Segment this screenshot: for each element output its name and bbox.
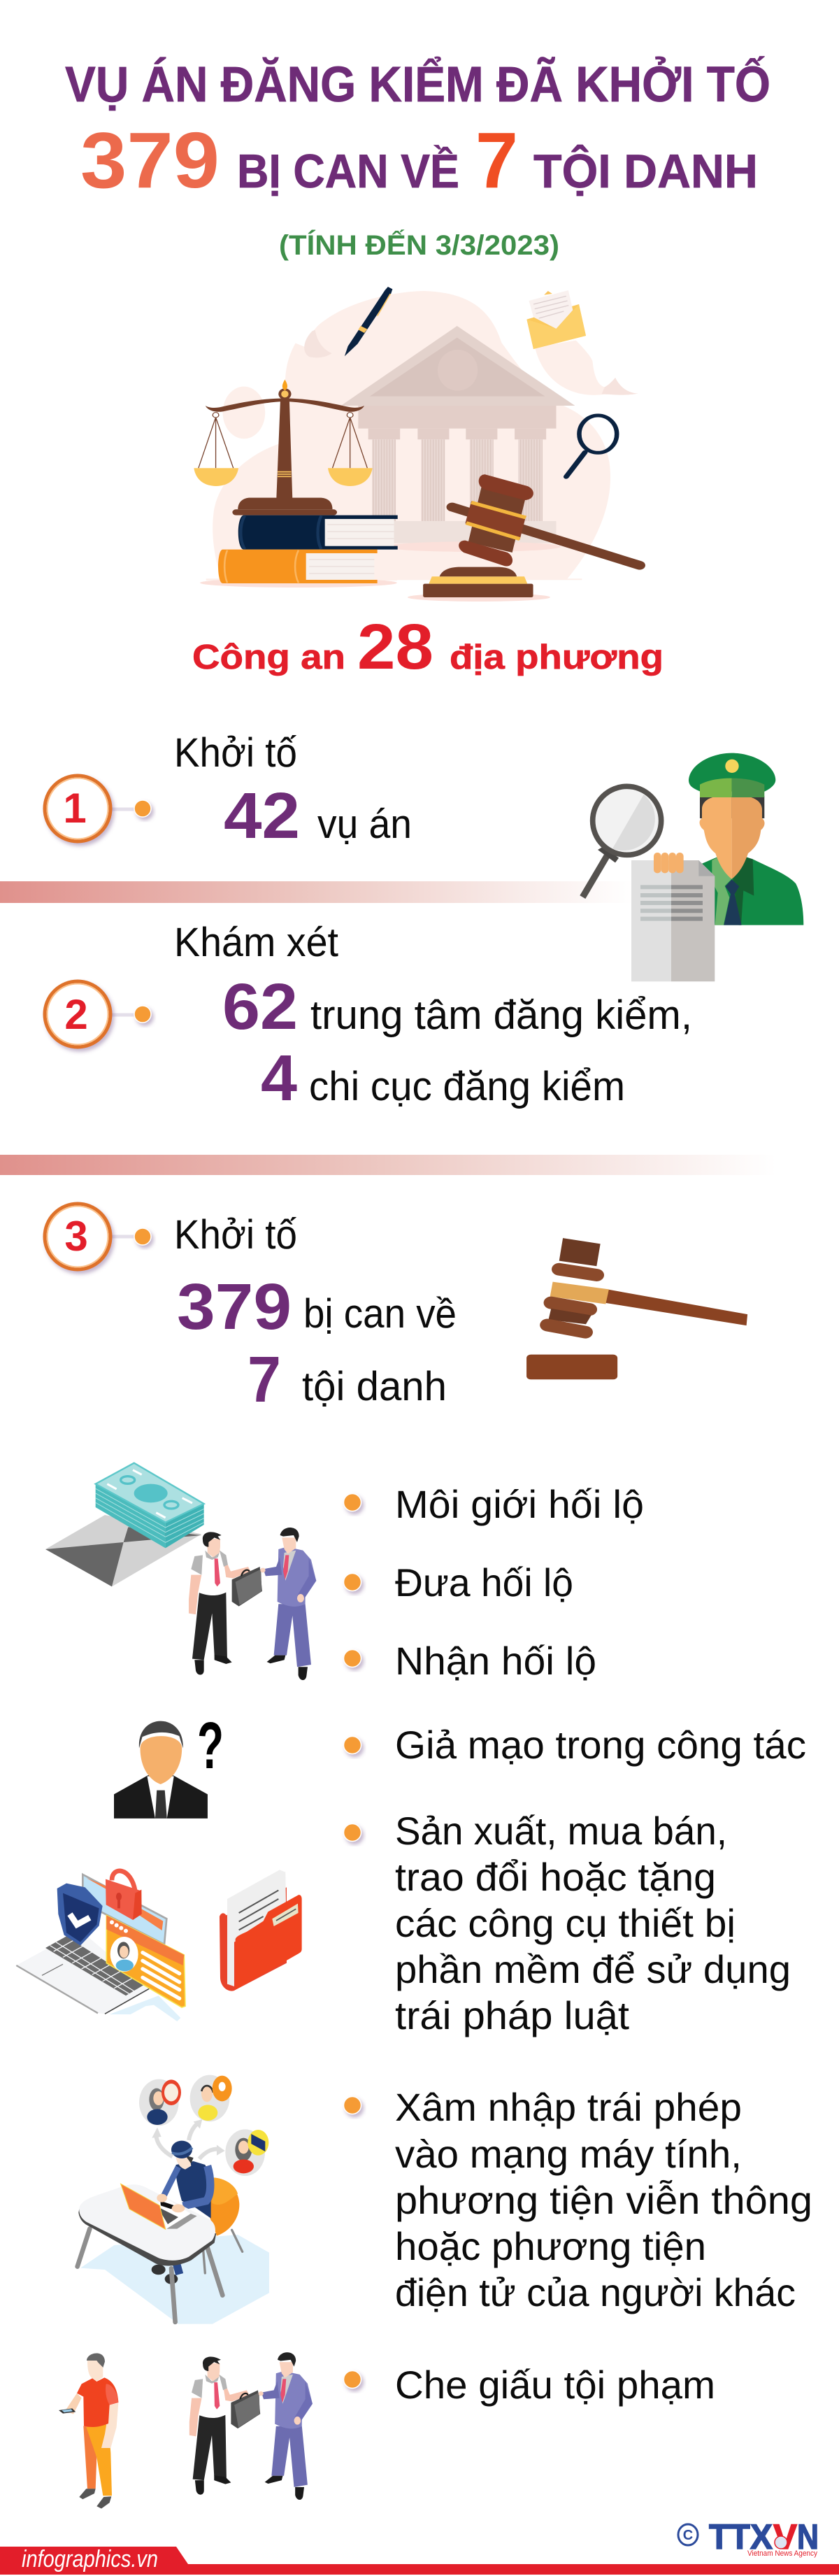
- crime list: bribery bullets: Nhận hối lộ: [395, 1639, 596, 1683]
- step 2 marker: 2: [64, 991, 88, 1038]
- step 3 marker: [45, 1204, 151, 1269]
- title line 2: [80, 116, 758, 204]
- crime: illegal tools: [344, 1809, 791, 2037]
- title line 2: BỊ CAN VỀ: [237, 144, 459, 198]
- illustration: two men exchanging briefcase (second): [189, 2352, 313, 2500]
- crime: forgery: Giả mạo trong công tác: [395, 1723, 806, 1767]
- icon: envelope: [526, 290, 586, 349]
- footer bar: [0, 2546, 839, 2575]
- title line 2: TỘI DANH: [533, 144, 758, 198]
- illustration: man with question mark: ?: [197, 1709, 224, 1783]
- crime: illegal network intrusion: điện tử của người khác: [395, 2270, 796, 2314]
- band divider 1: [0, 881, 633, 903]
- step 2 text: chi cục đăng kiểm: [309, 1064, 625, 1109]
- illustration: laptop with shield, lock and card: [16, 1871, 185, 2021]
- step 2 text: 4: [261, 1041, 297, 1114]
- courthouse: [341, 326, 575, 552]
- icon: pen: [345, 287, 392, 356]
- heading: Công an 28 địa phương: [192, 611, 664, 683]
- icon: red folder: [220, 1870, 302, 1991]
- step 3 text: 7: [248, 1343, 281, 1416]
- step 1 text: 42: [224, 779, 300, 852]
- step 3 text: [174, 1212, 457, 1416]
- step 2 text: Khám xét: [174, 920, 338, 965]
- crime: illegal network intrusion: [344, 2085, 812, 2314]
- illustration: hacker at desk with victims: [78, 2075, 269, 2324]
- step 3 marker: 3: [64, 1213, 88, 1260]
- illustration: man with question mark: [114, 1709, 224, 1819]
- icon: books: [200, 515, 398, 588]
- crime: illegal tools: Sản xuất, mua bán,: [395, 1809, 727, 1853]
- step 2 text: trung tâm đăng kiểm,: [310, 992, 692, 1038]
- heading: Công an 28 địa phương: 28: [357, 611, 433, 683]
- step 1 text: [174, 730, 412, 852]
- heading: Công an 28 địa phương: Công an: [192, 639, 345, 676]
- title line 2: 7: [475, 116, 518, 204]
- step 1 marker: [45, 776, 151, 841]
- logo: TTXVN: C: [683, 2528, 693, 2543]
- crime: illegal network intrusion: hoặc phương tiện: [395, 2224, 706, 2268]
- illustration: two men exchanging briefcase: [189, 1528, 316, 1680]
- illustration: man in red shirt: [59, 2354, 118, 2509]
- crime: illegal tools: trái pháp luật: [395, 1993, 629, 2037]
- step 3 text: tội danh: [302, 1364, 447, 1409]
- step 2 text: [174, 920, 692, 1114]
- crime: concealment: Che giấu tội phạm: [395, 2363, 715, 2407]
- crime: illegal tools: phần mềm để sử dụng: [395, 1947, 791, 1991]
- step 1 marker: 1: [63, 785, 87, 832]
- crime list: bribery bullets: Môi giới hối lộ: [395, 1482, 644, 1526]
- icon: magnifying glass: [566, 415, 617, 477]
- step 3 text: Khởi tố: [174, 1212, 297, 1258]
- step 1 text: vụ án: [317, 802, 412, 847]
- icon: scales of justice: [194, 380, 373, 515]
- logo: TTXVN: V: [773, 2517, 798, 2556]
- crime: illegal tools: trao đổi hoặc tặng: [395, 1855, 716, 1899]
- crime list: bribery bullets: Đưa hối lộ: [395, 1560, 573, 1604]
- crime: illegal network intrusion: Xâm nhập trái phép: [395, 2085, 742, 2129]
- title line 2: 379: [80, 116, 220, 204]
- title: [65, 57, 770, 204]
- crime list: bribery bullets: [344, 1482, 644, 1683]
- date subtitle: (TÍNH ĐẾN 3/3/2023): [279, 229, 559, 261]
- crime: illegal tools: các công cụ thiết bị: [395, 1901, 736, 1945]
- band divider 2: [0, 1155, 776, 1175]
- footer bar: infographics.vn: [22, 2546, 158, 2573]
- illustration: courthouse, scales, books, gavel: [194, 287, 640, 602]
- logo: TTXVN: Vietnam News Agency: [747, 2549, 817, 2558]
- icon: gavel: [408, 474, 640, 602]
- heading: Công an 28 địa phương: địa phương: [450, 639, 664, 676]
- illustration: officer with magnifier and document: [582, 753, 803, 981]
- crime: illegal network intrusion: phương tiện viễn thông: [395, 2178, 812, 2222]
- step 3 text: 379: [177, 1270, 292, 1343]
- icon: brown gavel: [526, 1238, 747, 1379]
- step 1 text: Khởi tố: [174, 730, 297, 776]
- title line 1: VỤ ÁN ĐĂNG KIỂM ĐÃ KHỞI TỐ: [65, 57, 770, 113]
- step 2 text: 62: [222, 970, 298, 1043]
- illustration: money on envelope: [45, 1463, 204, 1586]
- logo: TTXVN: N: [797, 2517, 819, 2556]
- step 2 marker: [45, 981, 151, 1047]
- logo: TTXVN: TTX: [709, 2517, 773, 2556]
- logo: TTXVN: [678, 2517, 819, 2558]
- step 3 text: bị can về: [303, 1291, 457, 1337]
- crime: illegal network intrusion: vào mạng máy tính,: [395, 2132, 742, 2176]
